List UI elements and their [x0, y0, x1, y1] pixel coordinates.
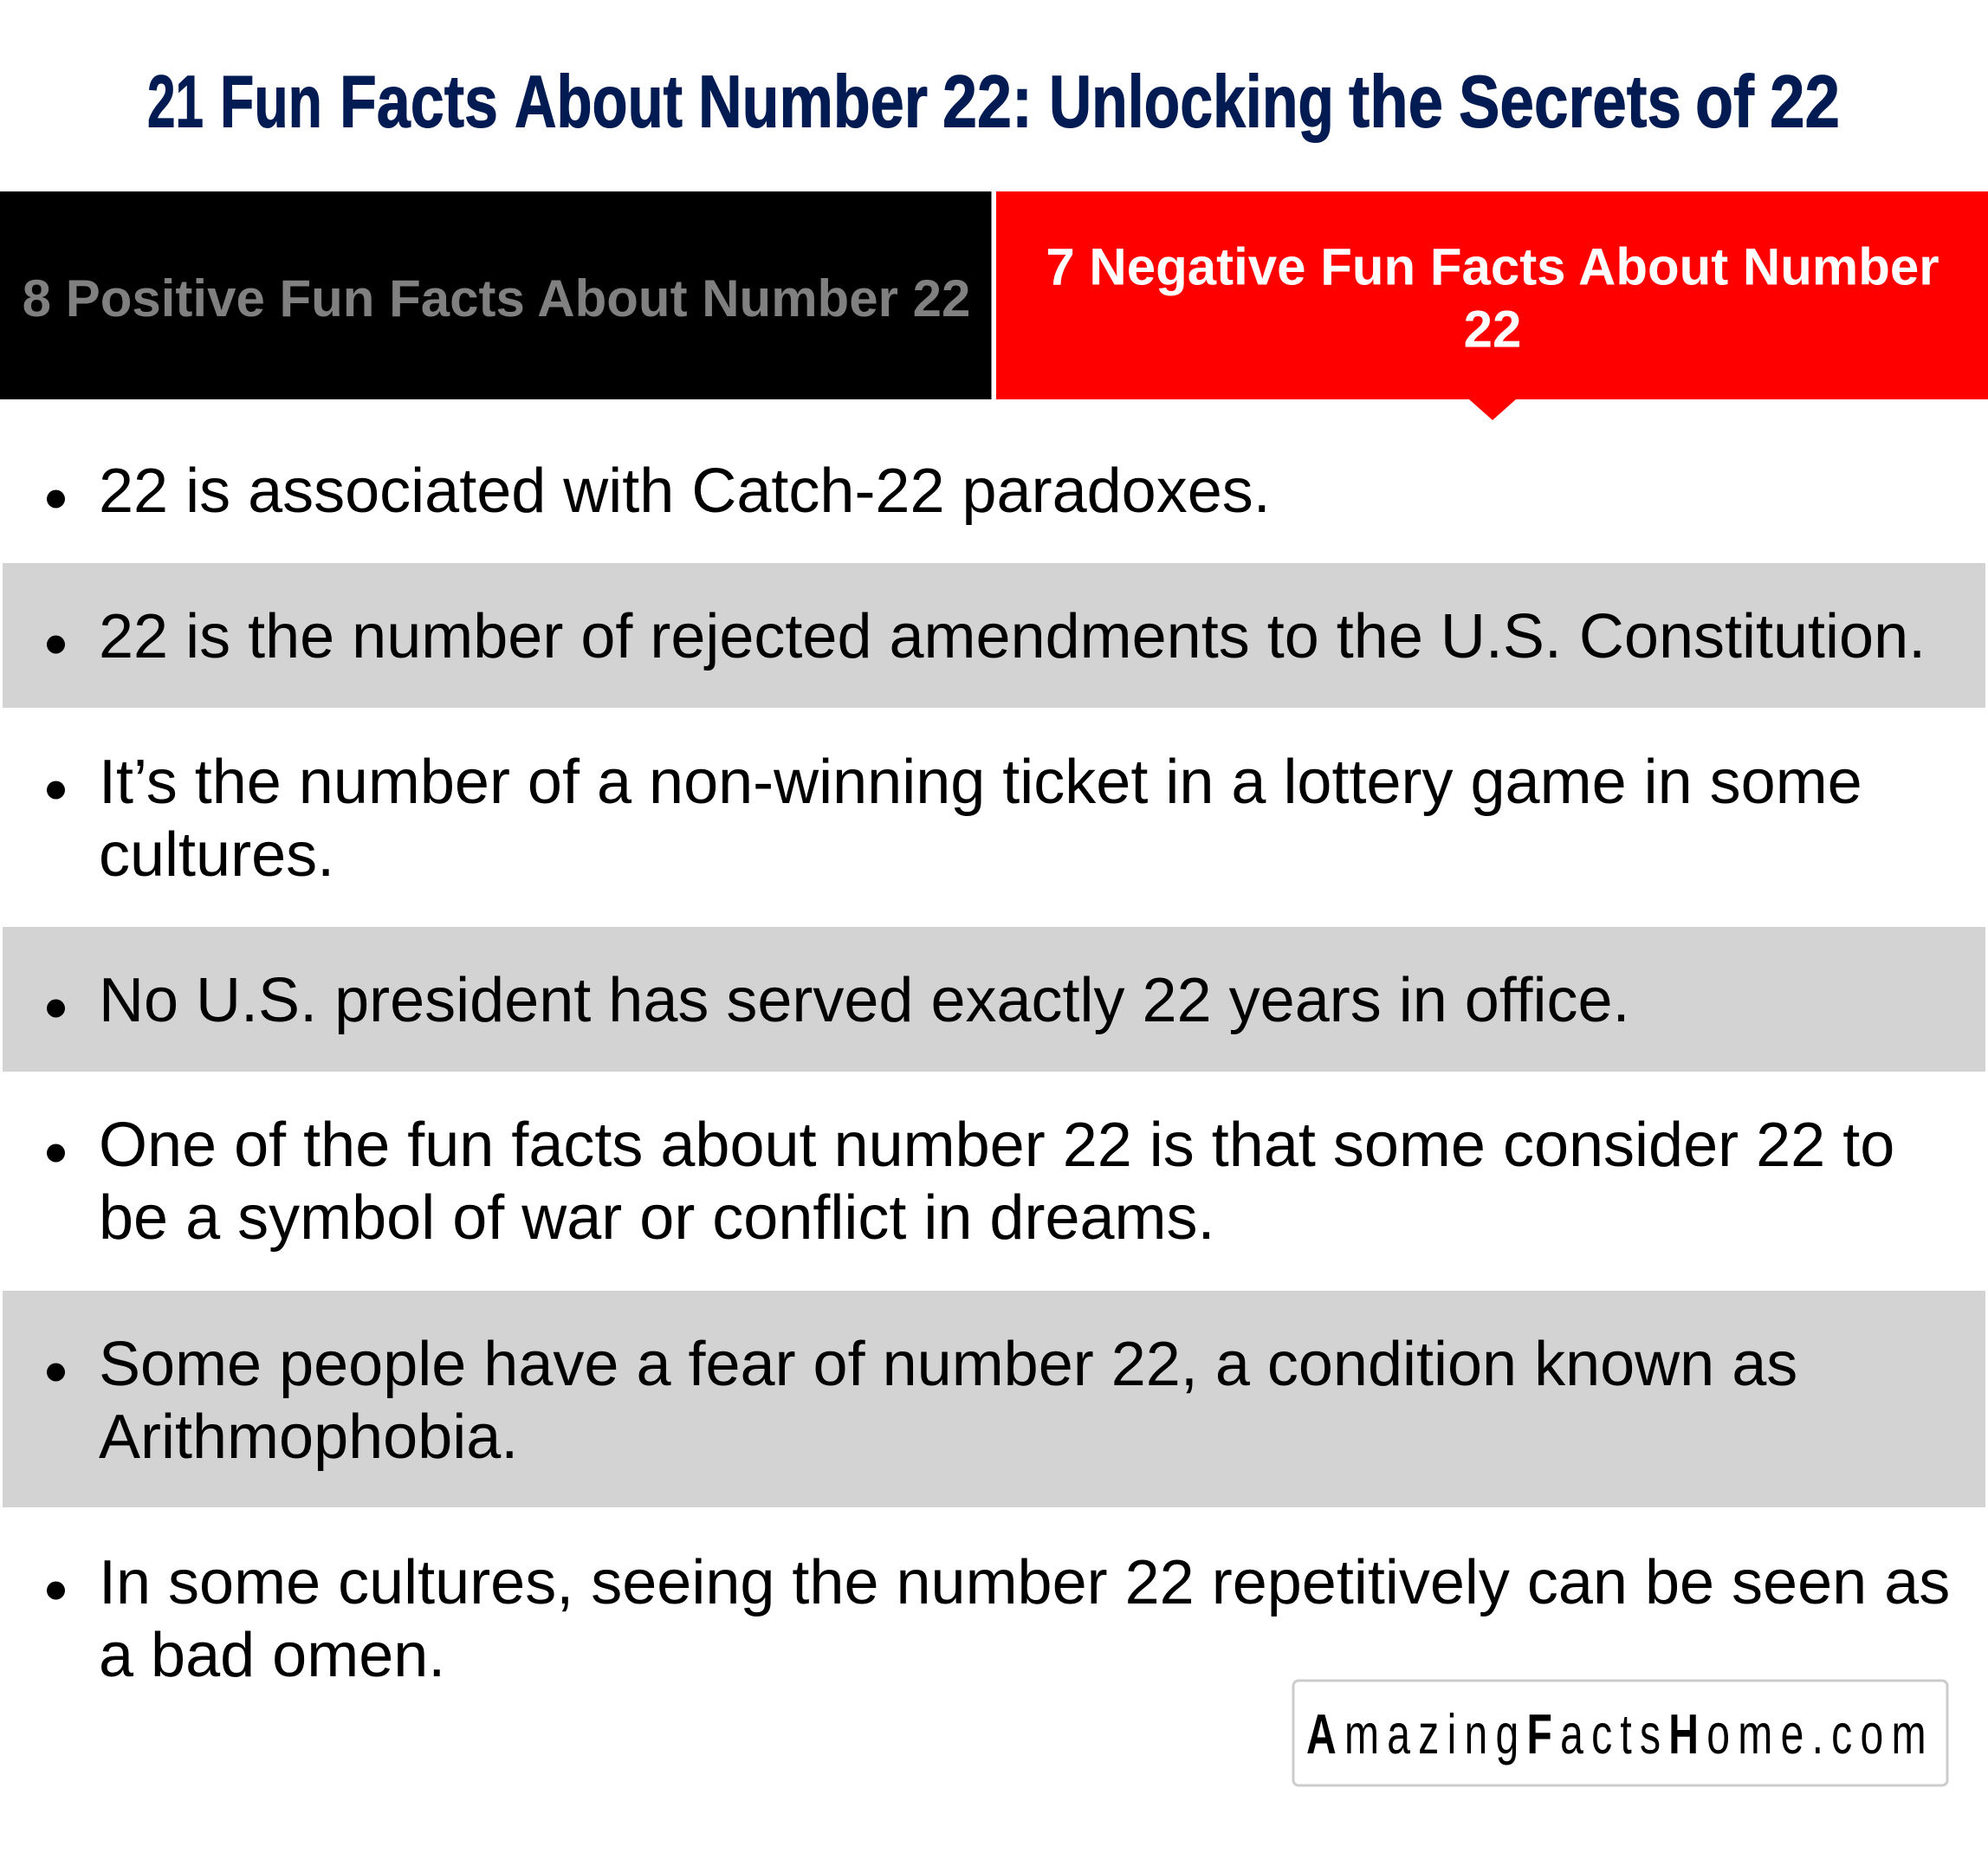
watermark: AmazingFactsHome.com [1293, 1681, 1947, 1785]
fact 4 row [3, 927, 1985, 1072]
title: About [515, 61, 683, 144]
fact 5: be a symbol of war or conflict in dreams. [99, 1183, 1215, 1253]
tab: negative facts (active) [996, 191, 1988, 420]
fact 2 row: 22 is the number of rejected amendments to the U.S. Constitution. [99, 602, 1926, 671]
fact 5 [47, 1111, 1894, 1253]
tab: positive facts: 8 Positive Fun Facts About Number 22 [23, 269, 970, 327]
title: Fun [220, 61, 322, 144]
fact 3: cultures. [99, 820, 334, 890]
tab: negative facts (active): 22 [1464, 300, 1521, 359]
fact 1: 22 is associated with Catch-22 paradoxes. [99, 457, 1271, 526]
fact 7: a bad omen. [99, 1621, 445, 1690]
title [147, 61, 1840, 144]
fact 3 [47, 748, 1862, 890]
title: Secrets [1459, 61, 1681, 144]
watermark: AmazingFactsHome.com: AmazingFactsHome.com [1306, 1703, 1934, 1766]
title: of [1695, 61, 1755, 144]
fact 6 row: Arithmophobia. [99, 1403, 518, 1472]
title: 21 [147, 61, 204, 144]
fact 6 row: Some people have a fear of number 22, a condition known as [99, 1330, 1797, 1399]
title: Unlocking [1049, 61, 1334, 144]
list of negative facts [3, 457, 1985, 1690]
fact 4 row: No U.S. president has served exactly 22 years in office. [99, 966, 1630, 1035]
title: 22: [942, 61, 1033, 144]
title: Facts [340, 61, 498, 144]
fact 7: In some cultures, seeing the number 22 repetitively can be seen as [99, 1548, 1950, 1617]
title: 22 [1770, 61, 1840, 144]
tab: negative facts (active): 7 Negative Fun Facts About Number [1046, 237, 1939, 296]
fact 3: It’s the number of a non-winning ticket in a lottery game in some [99, 748, 1862, 817]
fact 2 row [3, 563, 1985, 708]
title: the [1349, 61, 1443, 144]
tab: positive facts [0, 191, 991, 399]
fact 7 [47, 1548, 1950, 1690]
fact 6 row [3, 1291, 1985, 1507]
title: Number [698, 61, 928, 144]
fact 5: One of the fun facts about number 22 is that some consider 22 to [99, 1111, 1894, 1180]
